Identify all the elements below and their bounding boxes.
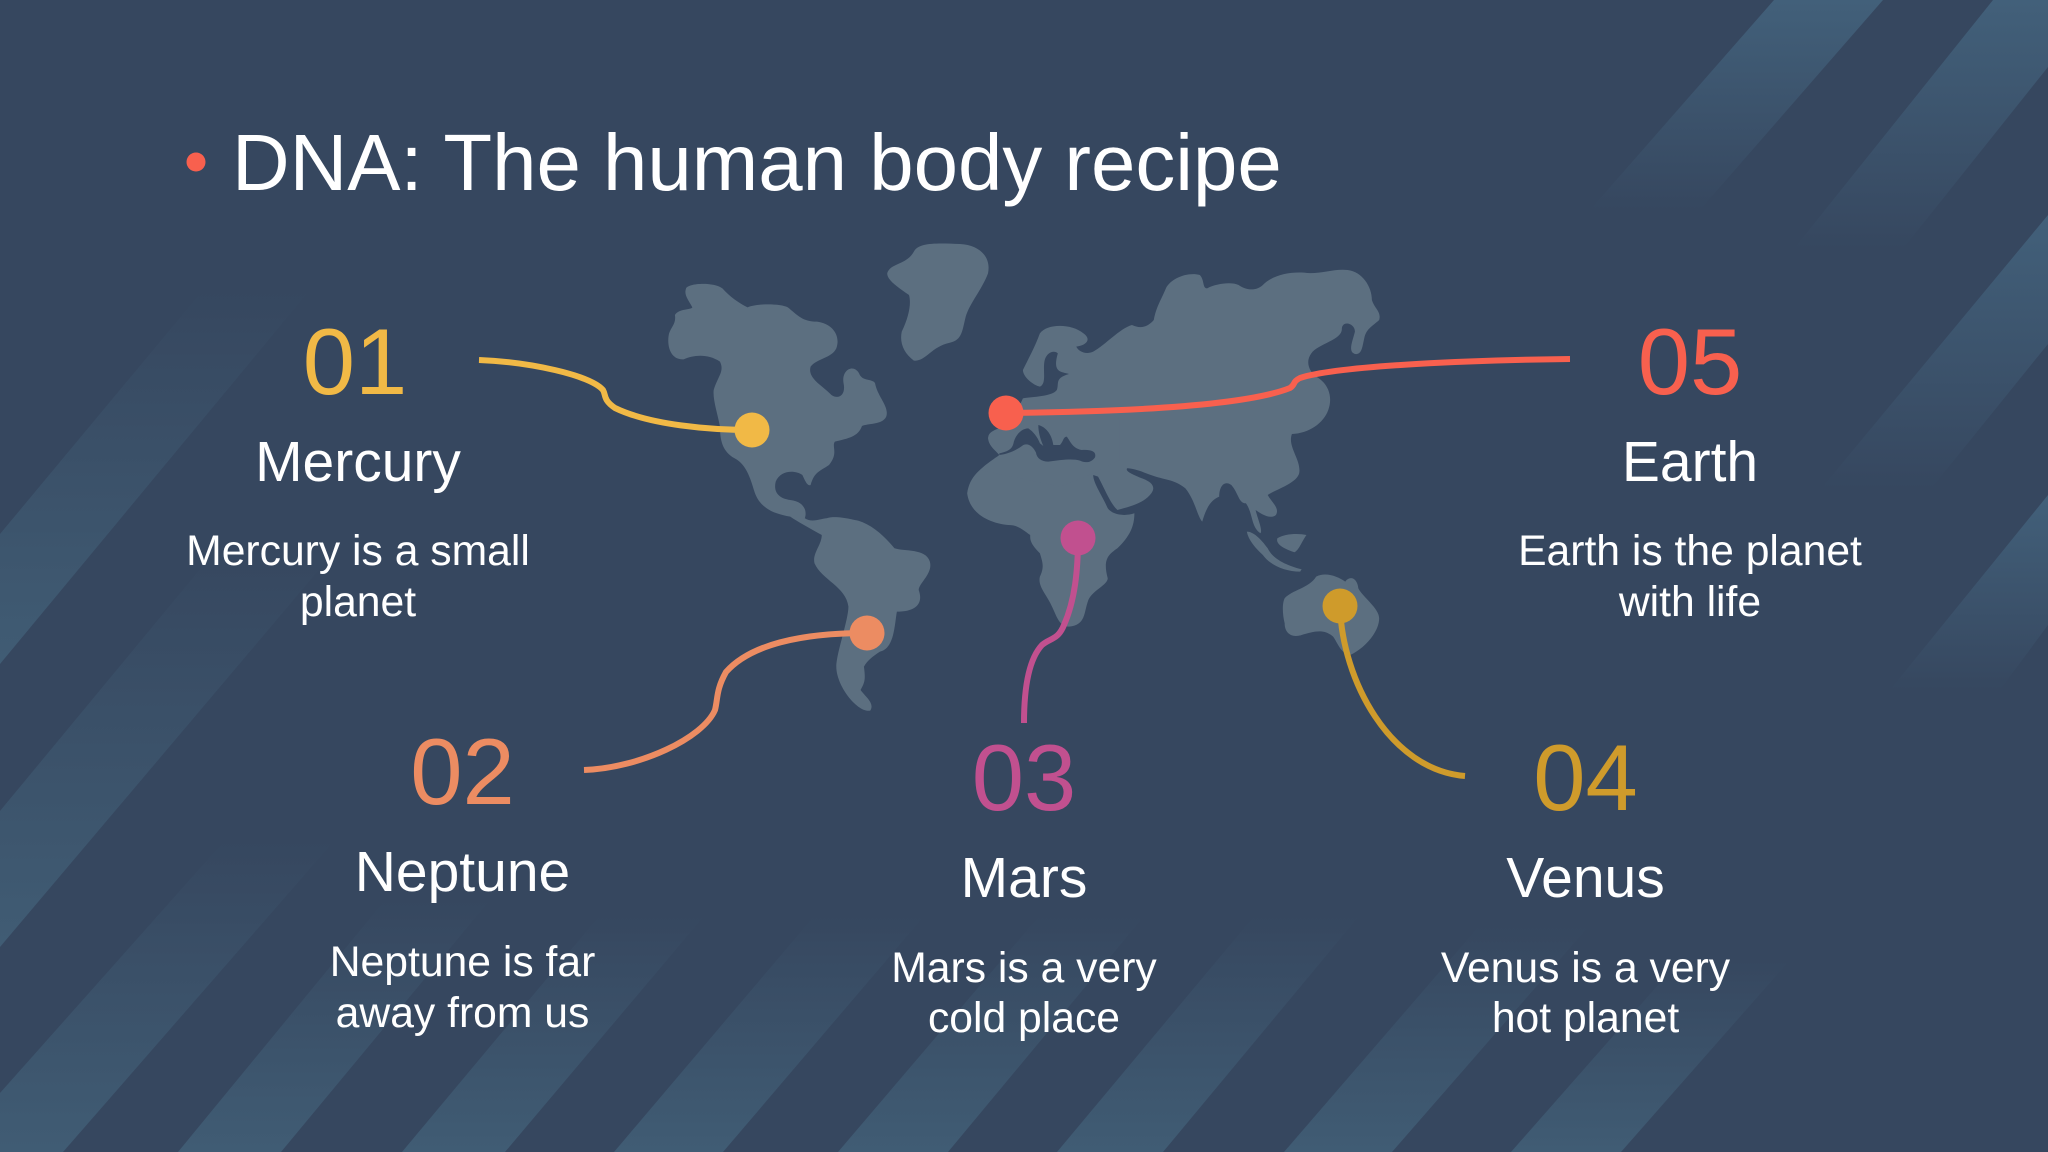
connector 02 neptune — [584, 616, 884, 770]
description earth: with life — [1618, 578, 1761, 626]
name mars: Mars — [961, 846, 1087, 910]
description mercury: Mercury is a small — [186, 527, 530, 575]
mediterranean sea — [999, 425, 1095, 462]
item 01 mercury — [186, 309, 530, 626]
name earth: Earth — [1622, 430, 1758, 494]
description venus: Venus is a very — [1441, 944, 1731, 992]
name neptune: Neptune — [355, 840, 570, 904]
number 03: 03 — [972, 725, 1076, 830]
americas — [668, 284, 930, 711]
borneo — [1277, 534, 1306, 552]
indonesia — [1247, 532, 1302, 572]
description mars: Mars is a very — [891, 944, 1157, 992]
item 05 earth — [1518, 309, 1862, 626]
title text: DNA: The human body recipe — [232, 118, 1282, 207]
number 04: 04 — [1533, 725, 1638, 830]
eurasia and africa — [967, 270, 1380, 627]
world map — [668, 243, 1380, 711]
item 03 mars — [891, 725, 1157, 1042]
description mercury: planet — [300, 578, 416, 626]
greenland — [887, 243, 989, 361]
title — [186, 118, 1282, 207]
title bullet — [186, 152, 206, 172]
item 04 venus — [1441, 725, 1731, 1042]
item 02 neptune — [330, 719, 595, 1037]
description venus: hot planet — [1492, 994, 1679, 1042]
southern europe land — [980, 398, 1120, 487]
number 05: 05 — [1638, 309, 1742, 414]
name venus: Venus — [1506, 846, 1665, 910]
connector 05 earth — [988, 359, 1570, 430]
description earth: Earth is the planet — [1518, 527, 1862, 575]
number 01: 01 — [303, 309, 407, 414]
connector 03 mars — [1024, 520, 1096, 723]
connector 01 mercury — [479, 360, 770, 448]
number 02: 02 — [410, 719, 515, 824]
description neptune: away from us — [336, 989, 589, 1037]
description neptune: Neptune is far — [330, 938, 595, 986]
description mars: cold place — [928, 994, 1120, 1042]
name mercury: Mercury — [255, 430, 461, 494]
australia — [1283, 575, 1379, 655]
connector 04 venus — [1322, 588, 1465, 776]
